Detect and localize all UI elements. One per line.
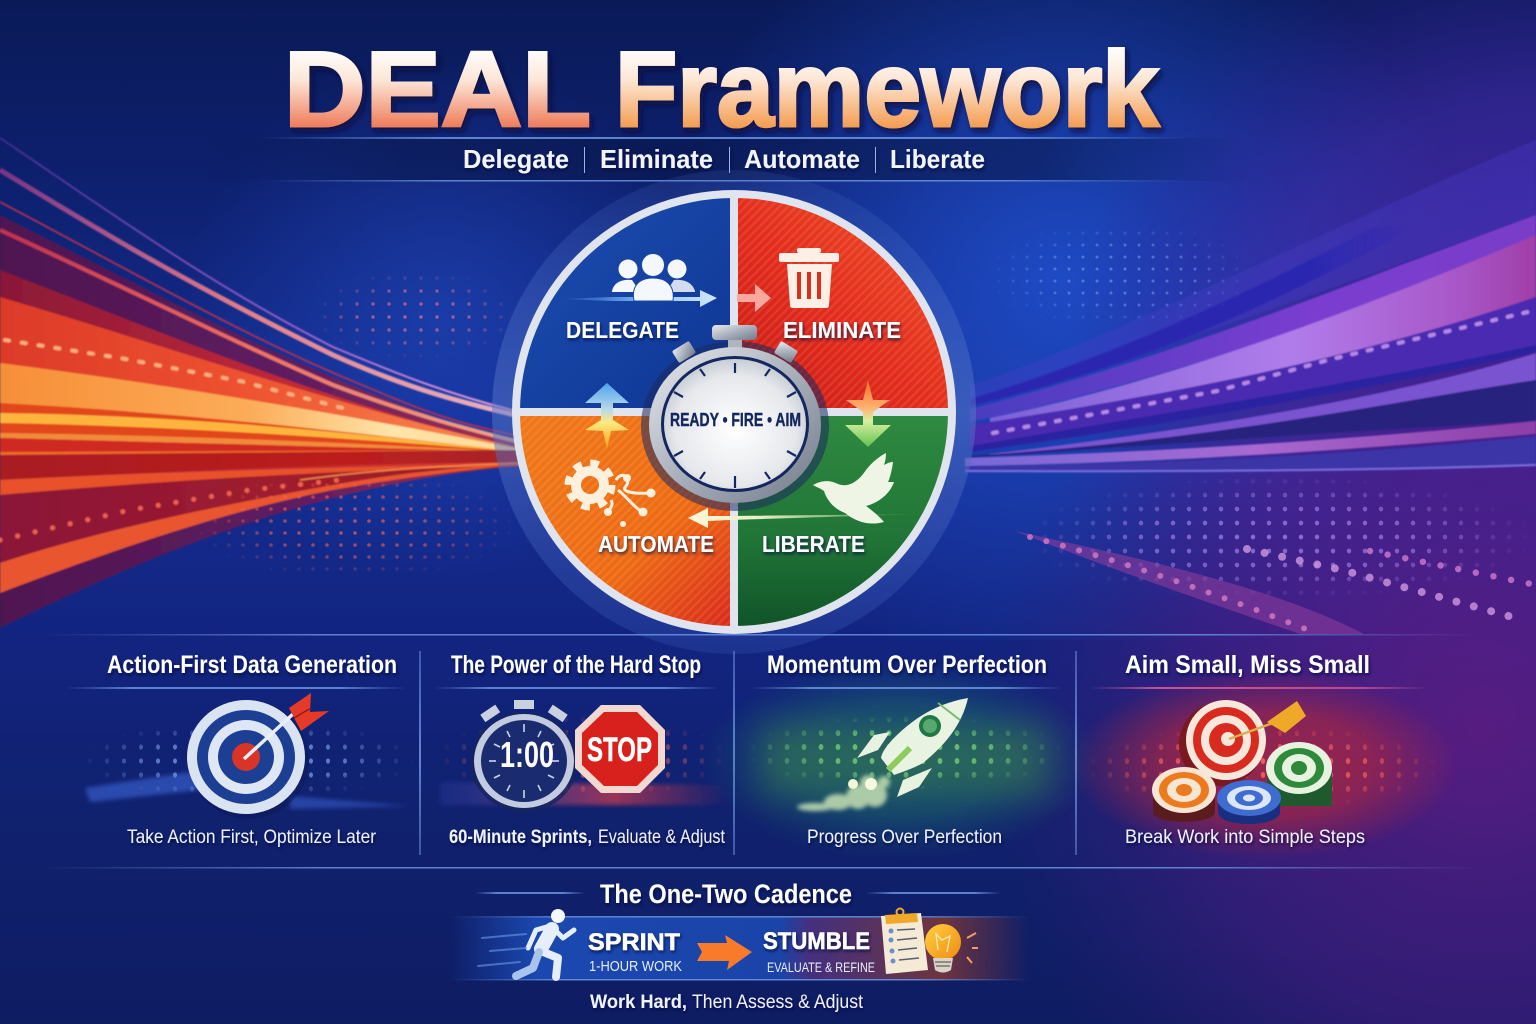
icon: rocket bbox=[797, 698, 968, 811]
arrow: eliminate to liberate bbox=[845, 380, 891, 447]
cadence caption: Work Hard, bbox=[590, 992, 687, 1013]
quadrant: eliminate bbox=[737, 190, 958, 408]
title: DEAL bbox=[284, 29, 591, 149]
subtitle: Eliminate bbox=[600, 144, 713, 174]
heading: Action-First Data Generation bbox=[107, 651, 397, 679]
label: liberate: LIBERATE bbox=[762, 531, 865, 557]
caption: 60-Minute Sprints, bbox=[449, 827, 592, 848]
heading: Aim Small, Miss Small bbox=[1125, 651, 1370, 679]
cadence heading: The One-Two Cadence bbox=[600, 879, 852, 909]
icon: people bbox=[612, 254, 695, 301]
panel: the power of the hard stop bbox=[434, 651, 730, 848]
panel: action-first data generation bbox=[66, 651, 415, 848]
heading: Momentum Over Perfection bbox=[767, 651, 1047, 679]
icon: stop sign bbox=[575, 705, 665, 793]
icon: dove bbox=[813, 453, 894, 524]
caption: Progress Over Perfection bbox=[807, 827, 1002, 848]
left halftone dots bbox=[190, 270, 520, 580]
icon: stopwatch 1:00 bbox=[470, 700, 578, 812]
icon: stop sign: STOP bbox=[587, 731, 652, 769]
left red and orange light rays bbox=[0, 138, 520, 628]
section rule top bbox=[40, 634, 1480, 636]
label: automate: AUTOMATE bbox=[598, 531, 714, 557]
arrow: sprint to stumble bbox=[697, 935, 752, 970]
DEAL wheel bbox=[492, 170, 976, 654]
icon: runner bbox=[478, 909, 574, 977]
caption: Break Work into Simple Steps bbox=[1125, 827, 1365, 848]
stopwatch ticks bbox=[674, 363, 796, 488]
quadrant: liberate bbox=[688, 416, 958, 636]
right purple light rays bbox=[965, 140, 1536, 471]
subtitle rule bbox=[260, 180, 1190, 182]
subtitle: Liberate bbox=[890, 144, 985, 174]
the one-two cadence: EVALUATE & REFINE bbox=[767, 959, 875, 975]
divider bbox=[1075, 651, 1077, 855]
section rule bottom bbox=[40, 867, 1480, 868]
icon: target with dart bbox=[187, 693, 329, 819]
label: eliminate: ELIMINATE bbox=[783, 317, 901, 343]
the one-two cadence bbox=[450, 879, 1030, 1013]
caption: Evaluate & Adjust bbox=[598, 827, 726, 848]
label: delegate: DELEGATE bbox=[566, 317, 679, 343]
panel: momentum over perfection bbox=[722, 655, 1080, 850]
icon: gear and circuit bbox=[568, 463, 656, 527]
the one-two cadence: 1-HOUR WORK bbox=[589, 958, 682, 975]
divider bbox=[733, 651, 735, 855]
icon: clipboard bbox=[881, 908, 928, 974]
arrow: eliminate pink bbox=[737, 284, 771, 312]
cadence caption: Then Assess & Adjust bbox=[692, 992, 864, 1013]
heading: The Power of the Hard Stop bbox=[451, 651, 701, 679]
divider bbox=[419, 651, 421, 855]
quadrant: automate bbox=[510, 416, 730, 636]
cadence caption bbox=[590, 992, 864, 1013]
arrow: automate to delegate bbox=[585, 383, 629, 449]
title rule bbox=[260, 137, 1190, 139]
title: Framework bbox=[615, 29, 1159, 149]
arrow: liberate to automate bbox=[688, 508, 920, 528]
icon: stopwatch 1:00: 1:00 bbox=[500, 734, 554, 775]
caption: Take Action First, Optimize Later bbox=[127, 827, 377, 848]
panel: aim small, miss small bbox=[1070, 651, 1460, 860]
icon: light bulb bbox=[925, 924, 978, 972]
subtitle bbox=[463, 144, 985, 174]
subtitle: Automate bbox=[744, 144, 860, 174]
icon: stacked targets bbox=[1152, 700, 1332, 824]
stopwatch bbox=[641, 325, 829, 511]
title bbox=[284, 29, 1159, 149]
right halftone dots bbox=[985, 220, 1536, 634]
caption bbox=[449, 827, 726, 848]
stumble label: STUMBLE bbox=[763, 928, 870, 955]
arrow: delegate to eliminate bbox=[558, 290, 717, 307]
sprint label: SPRINT bbox=[588, 929, 680, 956]
cadence band bbox=[450, 917, 1030, 980]
quadrant: delegate bbox=[510, 190, 730, 408]
icon: trash can bbox=[779, 248, 839, 308]
subtitle: Delegate bbox=[463, 144, 569, 174]
stopwatch label: READY • FIRE • AIM bbox=[670, 410, 801, 430]
